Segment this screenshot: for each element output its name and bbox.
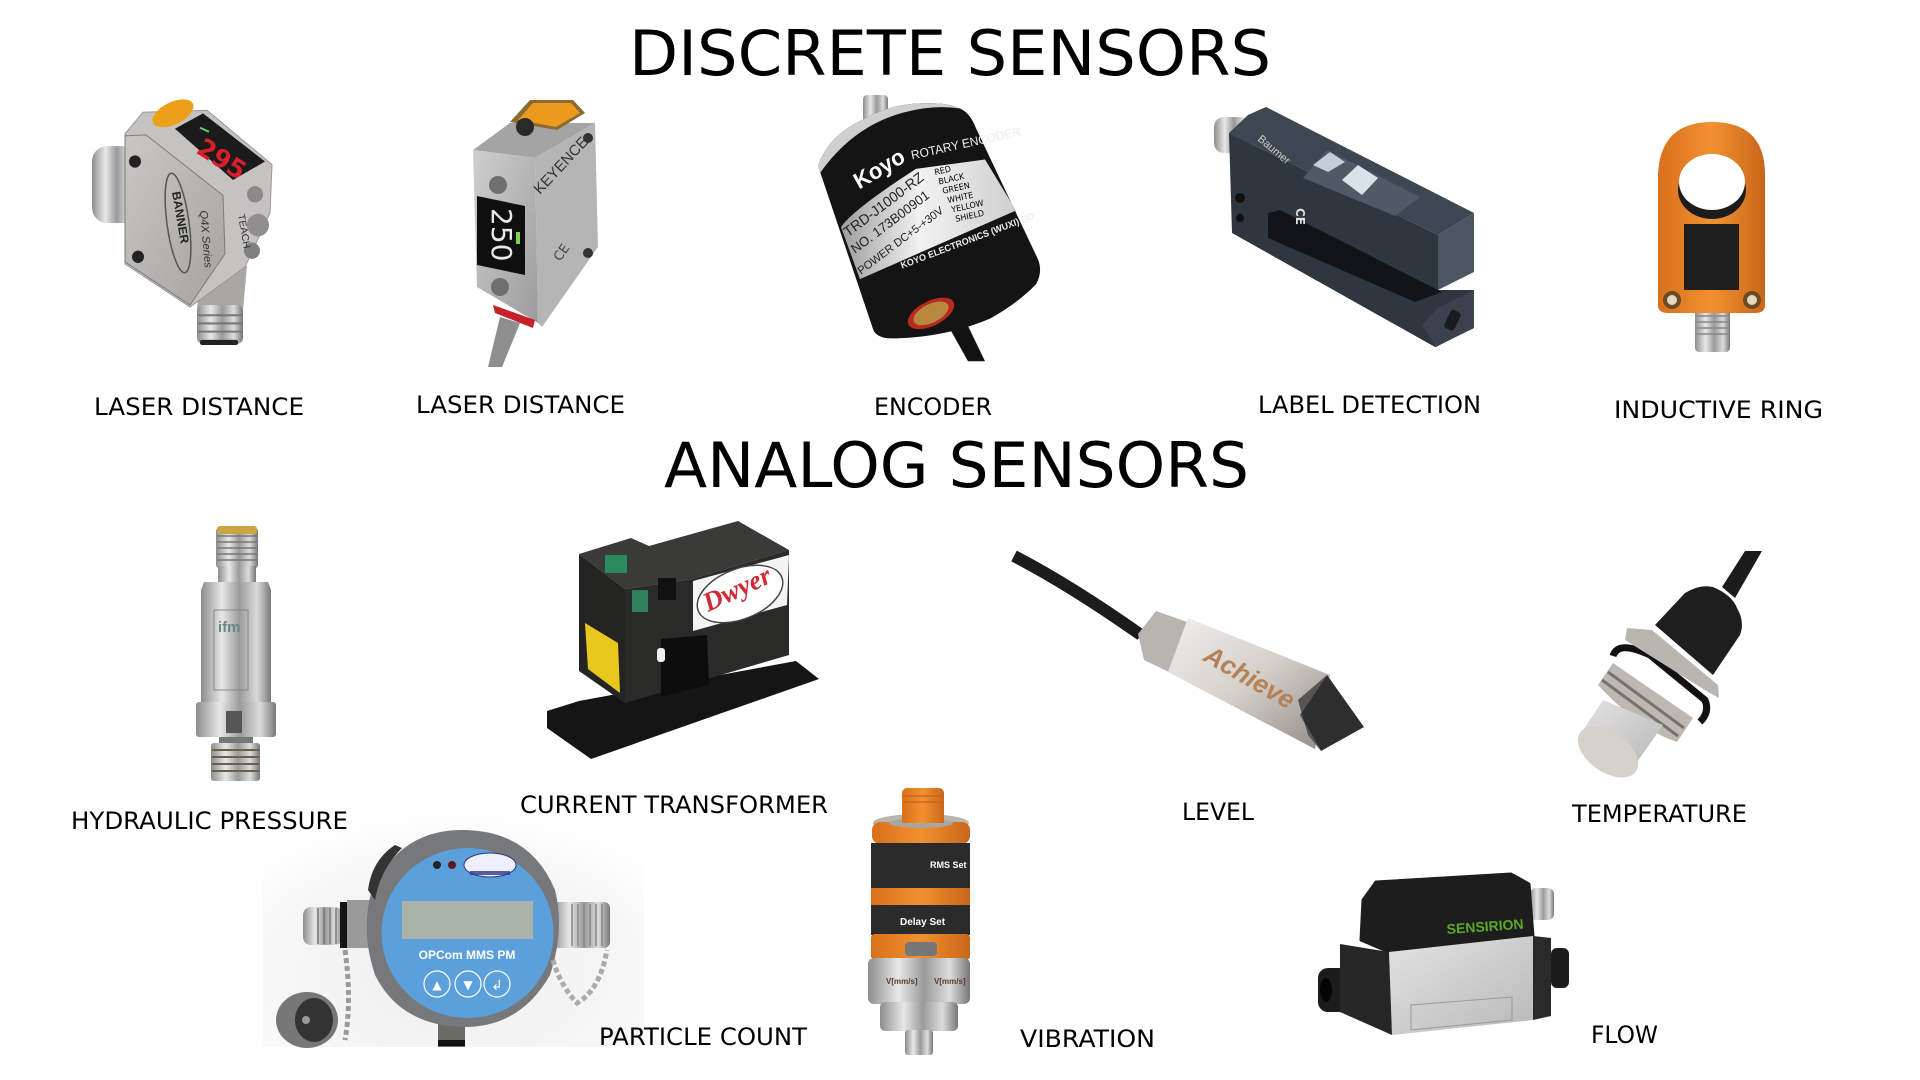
sensor: Banner laser distance bbox=[92, 94, 272, 345]
sensor: Sensirion flow: SENSIRION bbox=[1446, 916, 1524, 937]
sensor: Koyo encoder: YELLOW bbox=[949, 197, 984, 215]
sensor: ifm vibration: RMS Set bbox=[930, 860, 967, 870]
sensor: Achieve level: Achieve bbox=[1198, 639, 1300, 715]
label: TEMPERATURE bbox=[1571, 800, 1747, 828]
sensor: OPCom particle counter: ▲ bbox=[432, 978, 442, 992]
sensor: Koyo encoder: SHIELD bbox=[954, 208, 985, 224]
sensor: Koyo encoder: GREEN bbox=[941, 180, 971, 196]
sensor: ifm hydraulic pressure bbox=[196, 526, 276, 781]
label: VIBRATION bbox=[1020, 1025, 1155, 1053]
sensor: ifm vibration: V[mm/s] bbox=[934, 977, 966, 986]
sensor: ifm vibration bbox=[868, 788, 970, 1055]
sensor: Banner laser distance: BANNER bbox=[169, 190, 192, 245]
sensor: Koyo encoder: TRD-J1000-RZ bbox=[841, 169, 927, 241]
sensor: Banner laser distance: Q4X Series bbox=[197, 210, 214, 269]
sensor: Koyo encoder: RED bbox=[933, 163, 952, 177]
sensor: Koyo encoder: WHITE bbox=[946, 190, 974, 205]
sensor: Sensirion flow bbox=[1318, 874, 1569, 1035]
sensor: Keyence laser distance bbox=[473, 100, 598, 367]
label: FLOW bbox=[1591, 1021, 1658, 1049]
sensor: ifm hydraulic pressure: ifm bbox=[218, 619, 240, 636]
sensor: ifm inductive ring bbox=[1658, 122, 1765, 352]
sensor: Koyo encoder: POWER DC+5-+30V bbox=[856, 204, 946, 277]
sensor: Koyo encoder bbox=[818, 95, 1040, 361]
sensor: Dwyer current transformer bbox=[547, 521, 819, 759]
sensor: ifm vibration: Delay Set bbox=[900, 917, 946, 928]
label: INDUCTIVE RING bbox=[1614, 396, 1823, 424]
sensor: Keyence laser distance: 250 bbox=[485, 208, 518, 261]
sensor: Keyence laser distance: CE bbox=[551, 242, 573, 264]
sensor: Koyo encoder: ROTARY ENCODER bbox=[910, 124, 1022, 162]
title: analog sensors: ANALOG SENSORS bbox=[664, 429, 1249, 502]
label: PARTICLE COUNT bbox=[599, 1023, 807, 1051]
title: discrete sensors: DISCRETE SENSORS bbox=[629, 17, 1271, 90]
sensor: Dwyer current transformer: Dwyer bbox=[697, 560, 776, 618]
label: HYDRAULIC PRESSURE bbox=[71, 807, 348, 835]
label: CURRENT TRANSFORMER bbox=[520, 791, 828, 819]
label: LASER DISTANCE bbox=[416, 391, 625, 419]
sensor: Koyo encoder: NO. 173B00901 bbox=[848, 187, 932, 257]
label: LEVEL bbox=[1182, 798, 1255, 826]
label: LABEL DETECTION bbox=[1258, 391, 1481, 419]
sensor: ifm vibration: V[mm/s] bbox=[886, 977, 918, 986]
sensor: Banner laser distance: 295 bbox=[192, 133, 251, 186]
sensor: OPCom particle counter bbox=[263, 811, 644, 1048]
sensor: Keyence laser distance: KEYENCE bbox=[530, 134, 592, 198]
sensor: Banner laser distance: TEACH bbox=[235, 213, 252, 249]
sensor: OPCom particle counter: OPCom MMS PM bbox=[419, 948, 515, 962]
label: LASER DISTANCE bbox=[94, 393, 304, 421]
sensor: Baumer label detection bbox=[1214, 107, 1474, 347]
sensor: Koyo encoder: KOYO ELECTRONICS (WUXI) CO bbox=[899, 211, 1035, 271]
label: ENCODER bbox=[874, 393, 992, 421]
sensor: temperature bbox=[1569, 551, 1762, 788]
sensor: Koyo encoder: BLACK bbox=[937, 171, 966, 186]
sensor: Baumer label detection: CE bbox=[1293, 208, 1307, 225]
sensor: Achieve level bbox=[1014, 556, 1364, 751]
sensor: OPCom particle counter: ↲ bbox=[491, 978, 503, 994]
sensor: Baumer label detection: Baumer bbox=[1255, 133, 1293, 167]
sensor: Koyo encoder: Koyo bbox=[849, 143, 909, 194]
sensor: OPCom particle counter: ▼ bbox=[463, 978, 473, 992]
